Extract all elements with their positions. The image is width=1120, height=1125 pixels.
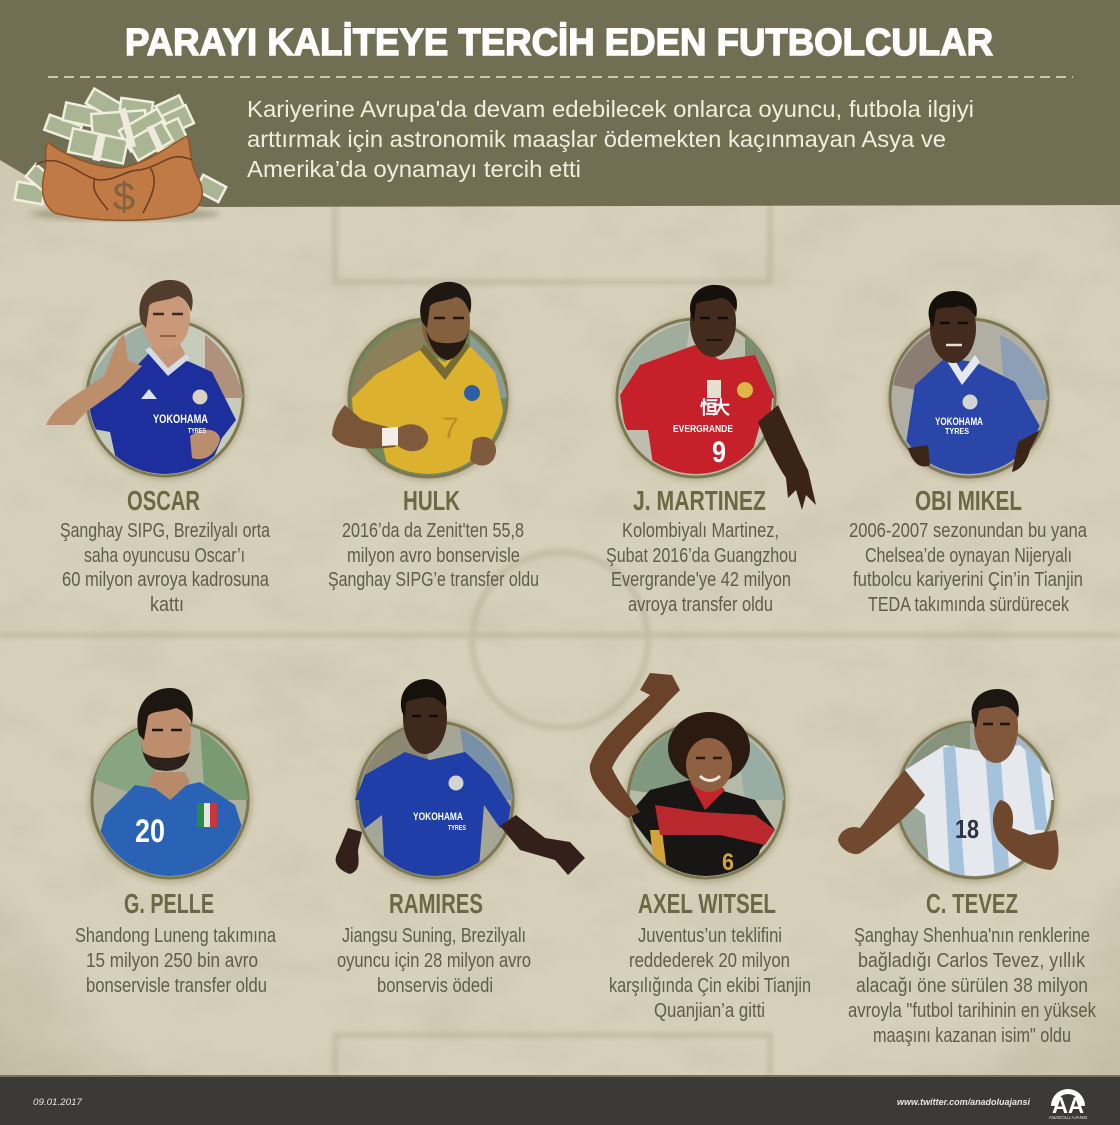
figure: 7 — [442, 412, 459, 445]
description: G. Pelle: bonservisle transfer oldu — [86, 975, 267, 997]
date: 09.01.2017 — [33, 1097, 83, 1108]
player: G. Pelle — [88, 688, 252, 883]
description: Oscar — [60, 520, 271, 616]
player: Oscar — [46, 280, 246, 480]
description: Oscar: 60 milyon avroya kadrosuna — [62, 569, 270, 591]
figure — [96, 688, 246, 880]
player name: Ramires: RAMIRES — [389, 888, 483, 919]
logo: Anadolu Ajansı: AA — [1052, 1092, 1084, 1118]
dashed divider — [48, 76, 1073, 78]
player name: Hulk: HULK — [403, 485, 460, 516]
intro text: arttırmak için astronomik maaşlar ödemekten kaçınmayan Asya ve — [247, 126, 946, 152]
figure: YOKOHAMA — [935, 416, 983, 428]
figure: YOKOHAMA — [413, 811, 463, 823]
description: Oscar: kattı — [150, 594, 184, 616]
intro text: Kariyerine Avrupa'da devam edebilecek onlarca oyuncu, futbola ilgiyi — [247, 96, 974, 122]
player name: Oscar: OSCAR — [127, 485, 200, 516]
player name: Axel Witsel: AXEL WITSEL — [638, 888, 776, 919]
twitter address: www.twitter.com/anadoluajansi — [897, 1097, 1030, 1108]
description: J. Martinez: avroya transfer oldu — [628, 594, 773, 616]
player name: G. Pelle: G. PELLE — [124, 888, 214, 919]
player name: J. Martinez: J. MARTINEZ — [633, 485, 766, 516]
description: Hulk: Şanghay SIPG’e transfer oldu — [328, 569, 539, 591]
intro text: Amerika’da oynamayı tercih etti — [247, 156, 581, 182]
description: C. Tevez — [848, 925, 1097, 1047]
figure: 9 — [712, 436, 726, 469]
footer bar — [0, 1075, 1120, 1125]
description: G. Pelle — [75, 925, 277, 997]
figure — [336, 679, 585, 880]
player: C. Tevez — [838, 689, 1058, 883]
figure: TYRES — [188, 428, 206, 435]
figure: 恒大 — [700, 397, 730, 418]
description: J. Martinez — [606, 520, 797, 616]
player: Obi Mikel — [887, 291, 1051, 481]
description: J. Martinez: Şubat 2016’da Guangzhou — [606, 545, 797, 567]
description: Axel Witsel: karşılığında Çin ekibi Tianjin — [609, 975, 811, 997]
description: Obi Mikel: Chelsea’de oynayan Nijeryalı — [865, 545, 1072, 567]
description: G. Pelle: Shandong Luneng takımına — [75, 925, 277, 947]
figure — [332, 282, 505, 478]
figure — [46, 280, 236, 478]
player name: C. Tevez: C. TEVEZ — [926, 888, 1018, 919]
icon: money bag — [15, 89, 226, 221]
description: Axel Witsel: Quanjian’a gitti — [654, 1000, 765, 1022]
portrait ring — [624, 719, 788, 883]
description: Ramires: oyuncu için 28 milyon avro — [337, 950, 531, 972]
title: PARAYI KALİTEYE TERCİH EDEN FUTBOLCULAR — [125, 22, 993, 64]
description: Obi Mikel: futbolcu kariyerini Çin’in Tianjin — [853, 569, 1083, 591]
description: Obi Mikel: TEDA takımında sürdürecek — [868, 594, 1070, 616]
player: Hulk — [332, 282, 510, 481]
description: Axel Witsel — [609, 925, 811, 1022]
portrait ring — [346, 317, 510, 481]
description: Axel Witsel: reddederek 20 milyon — [629, 950, 790, 972]
description: J. Martinez: Evergrande'ye 42 milyon — [611, 569, 791, 591]
description: C. Tevez: maaşını kazanan isim" oldu — [873, 1025, 1071, 1047]
figure: 6 — [722, 849, 734, 876]
logo: Anadolu Ajansı: ANADOLU AJANSI — [1049, 1115, 1087, 1120]
player: Ramires — [336, 679, 585, 883]
figure — [905, 291, 1042, 480]
figure — [838, 689, 1058, 880]
figure — [620, 285, 816, 510]
description: Hulk: 2016’da da Zenit'ten 55,8 — [342, 520, 524, 542]
header band — [0, 0, 1120, 207]
player name: Obi Mikel: OBI MIKEL — [915, 485, 1022, 516]
description: Oscar: saha oyuncusu Oscar’ı — [84, 545, 245, 567]
portrait ring — [84, 318, 246, 480]
description: C. Tevez: bağladığı Carlos Tevez, yıllık — [858, 950, 1086, 972]
figure: YOKOHAMA — [153, 412, 208, 426]
description: Hulk — [328, 520, 539, 591]
figure: EVERGRANDE — [673, 424, 733, 435]
portrait ring — [614, 317, 778, 481]
intro text — [247, 96, 974, 182]
description: Oscar: Şanghay SIPG, Brezilyalı orta — [60, 520, 271, 542]
figure — [590, 673, 775, 880]
description: C. Tevez: alacağı öne sürülen 38 milyon — [856, 975, 1088, 997]
description: Ramires: Jiangsu Suning, Brezilyalı — [342, 925, 526, 947]
description: Obi Mikel — [849, 520, 1088, 616]
description: Axel Witsel: Juventus’un teklifini — [638, 925, 782, 947]
portrait ring — [353, 719, 517, 883]
description: J. Martinez: Kolombiyalı Martinez, — [622, 520, 779, 542]
description: Hulk: milyon avro bonservisle — [347, 545, 520, 567]
portrait ring — [887, 317, 1051, 481]
player: J. Martinez — [614, 285, 816, 510]
figure: 18 — [955, 814, 979, 844]
portrait ring — [88, 719, 252, 883]
figure: 20 — [135, 813, 165, 849]
description: Ramires: bonservis ödedi — [377, 975, 493, 997]
player: Axel Witsel — [590, 673, 788, 883]
description: Ramires — [337, 925, 531, 997]
portrait ring — [893, 719, 1057, 883]
icon: money bag: $ — [113, 175, 135, 219]
figure: TYRES — [945, 427, 970, 436]
figure: TYRES — [448, 825, 466, 832]
description: G. Pelle: 15 milyon 250 bin avro — [86, 950, 258, 972]
